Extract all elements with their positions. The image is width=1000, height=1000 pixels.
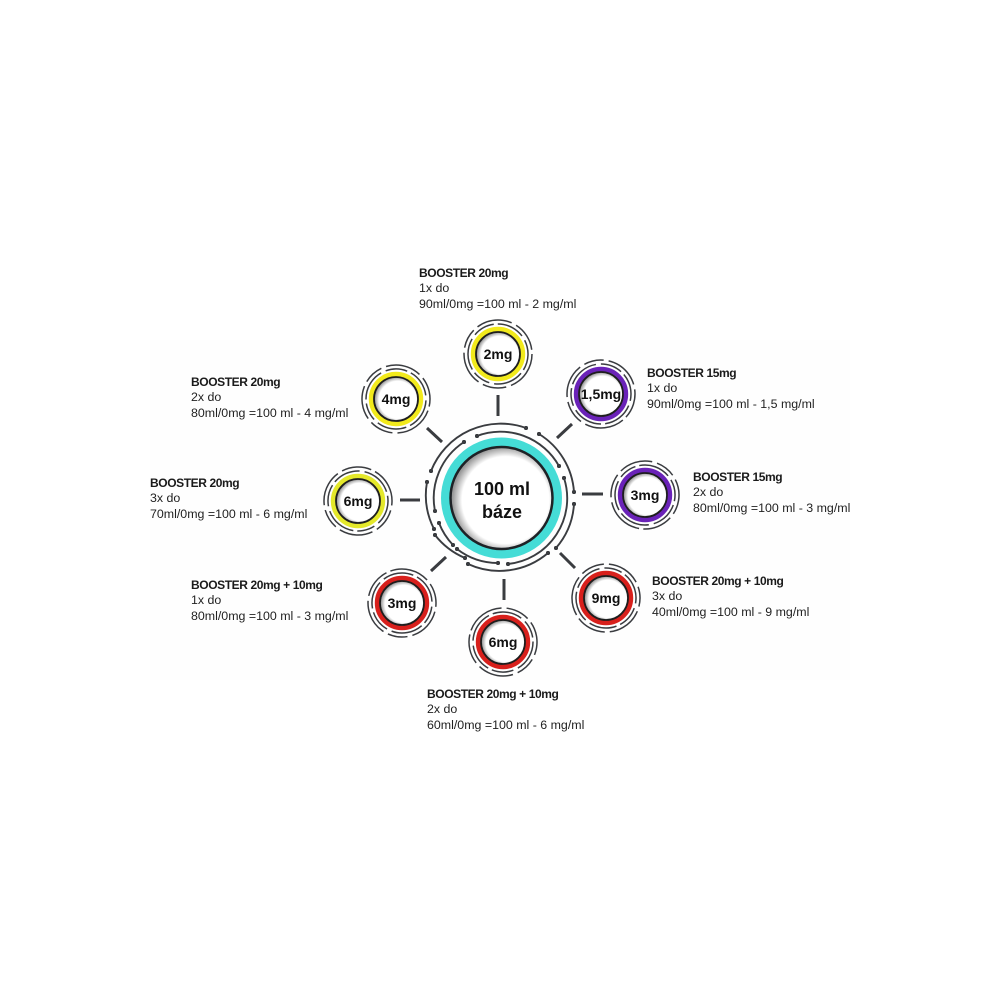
label: 6mg yellow: BOOSTER 20mg — [150, 476, 239, 490]
label: 1,5mg — [647, 366, 815, 411]
label: 4mg — [191, 375, 348, 420]
hub white disc — [450, 447, 552, 549]
label: 3mg red: BOOSTER 20mg + 10mg — [191, 578, 323, 592]
label: 4mg: 80ml/0mg =100 ml - 4 mg/ml — [191, 406, 348, 420]
connector spokes — [400, 395, 603, 600]
node: 6mg red: 6mg — [489, 634, 517, 650]
label: 9mg — [652, 574, 809, 619]
label: 1,5mg: 90ml/0mg =100 ml - 1,5 mg/ml — [647, 397, 815, 411]
label: 3mg purple: 2x do — [693, 485, 723, 499]
label: 6mg red: 2x do — [427, 702, 457, 716]
node: 9mg red — [560, 552, 652, 644]
node: 6mg yellow — [312, 455, 404, 547]
node: 6mg red — [459, 598, 547, 686]
label: 1,5mg: BOOSTER 15mg — [647, 366, 736, 380]
label: 6mg yellow: 70ml/0mg =100 ml - 6 mg/ml — [150, 507, 307, 521]
node: 3mg red: 3mg — [388, 595, 416, 611]
label: 6mg red — [427, 687, 584, 732]
label: 1,5mg: 1x do — [647, 381, 677, 395]
label: 3mg purple: 80ml/0mg =100 ml - 3 mg/ml — [693, 501, 850, 515]
hub dashed arcs — [426, 424, 574, 571]
label: 6mg red: 60ml/0mg =100 ml - 6 mg/ml — [427, 718, 584, 732]
node: 6mg yellow: 6mg — [344, 493, 372, 509]
node: 9mg red: 9mg — [592, 590, 620, 606]
label: 6mg yellow — [150, 476, 307, 521]
central hub: 100 ml báze: báze — [482, 502, 522, 522]
label: 2mg: BOOSTER 20mg — [419, 266, 508, 280]
label: 3mg red: 80ml/0mg =100 ml - 3 mg/ml — [191, 609, 348, 623]
hub label: 100 ml — [474, 479, 530, 499]
label: 6mg yellow: 3x do — [150, 491, 180, 505]
label: 3mg red: 1x do — [191, 593, 221, 607]
node: 4mg yellow: 4mg — [382, 391, 410, 407]
label: 9mg: 3x do — [652, 589, 682, 603]
node: 4mg yellow — [352, 355, 440, 443]
label: 2mg: 1x do — [419, 281, 449, 295]
node: 3mg purple — [604, 454, 686, 536]
node: 2mg yellow: 2mg — [484, 346, 512, 362]
node: 1,5mg purple — [553, 346, 649, 442]
hub cyan ring — [446, 442, 558, 554]
label: 9mg: BOOSTER 20mg + 10mg — [652, 574, 784, 588]
node: 1,5mg purple: 1,5mg — [581, 386, 621, 402]
node: 2mg yellow — [456, 312, 540, 396]
label: 6mg red: BOOSTER 20mg + 10mg — [427, 687, 559, 701]
node: 3mg purple: 3mg — [631, 487, 659, 503]
central hub: 100 ml báze — [426, 424, 574, 571]
label: 4mg: 2x do — [191, 390, 221, 404]
label: 2mg: 90ml/0mg =100 ml - 2 mg/ml — [419, 297, 576, 311]
label: 3mg red — [191, 578, 348, 623]
label: 9mg: 40ml/0mg =100 ml - 9 mg/ml — [652, 605, 809, 619]
label: 3mg purple — [693, 470, 850, 515]
label: 4mg: BOOSTER 20mg — [191, 375, 280, 389]
node: 3mg red — [358, 559, 446, 647]
label: 3mg purple: BOOSTER 15mg — [693, 470, 782, 484]
label: 2mg — [419, 266, 576, 311]
